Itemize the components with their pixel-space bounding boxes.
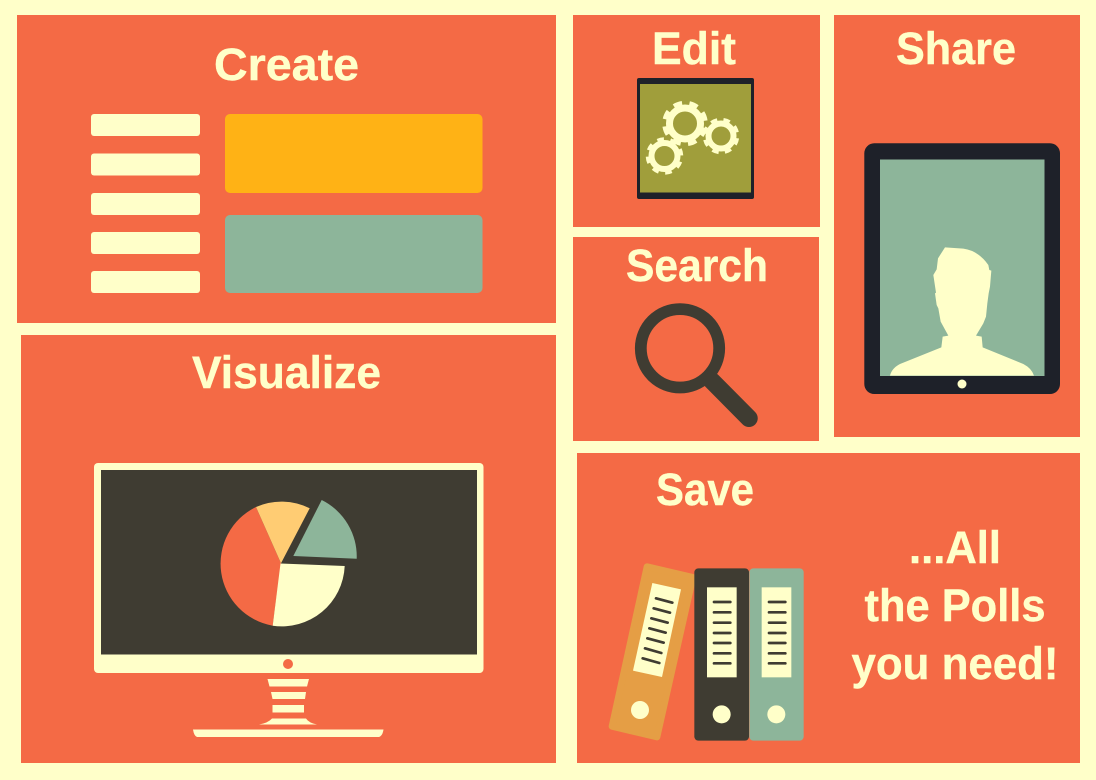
icon: binders	[612, 567, 804, 741]
heading: search: Search	[626, 240, 768, 291]
icon: gears on screen	[637, 78, 754, 199]
monitor stand	[193, 679, 384, 737]
binder teal	[749, 568, 804, 741]
panel: create	[17, 15, 556, 323]
panel: edit	[573, 15, 820, 227]
binder dark	[694, 568, 749, 741]
panel: search	[573, 237, 819, 441]
gear left	[643, 135, 686, 177]
text: all the polls you need: the Polls	[864, 580, 1046, 631]
heading: save: Save	[656, 464, 754, 515]
text: all the polls you need: you need!	[852, 638, 1058, 689]
gear right	[703, 118, 739, 154]
pie chart	[221, 500, 357, 626]
panel: save	[577, 453, 1080, 763]
list lines	[91, 114, 200, 293]
text: all the polls you need: ...All	[909, 522, 1001, 573]
amber block	[225, 114, 482, 193]
panel: visualize	[21, 335, 556, 763]
gear large	[661, 100, 709, 147]
heading: edit: Edit	[652, 23, 736, 74]
person silhouette	[890, 247, 1034, 376]
heading: create: Create	[214, 39, 359, 90]
heading: share: Share	[896, 23, 1016, 74]
teal block	[225, 215, 482, 293]
binder orange	[612, 567, 693, 737]
icon: magnifying glass	[641, 309, 749, 418]
panel: share	[834, 15, 1080, 437]
heading: visualize: Visualize	[192, 347, 381, 398]
icon: monitor with pie chart	[94, 463, 484, 737]
text: all the polls you need	[852, 522, 1058, 689]
icon: tablet with person	[864, 143, 1060, 394]
